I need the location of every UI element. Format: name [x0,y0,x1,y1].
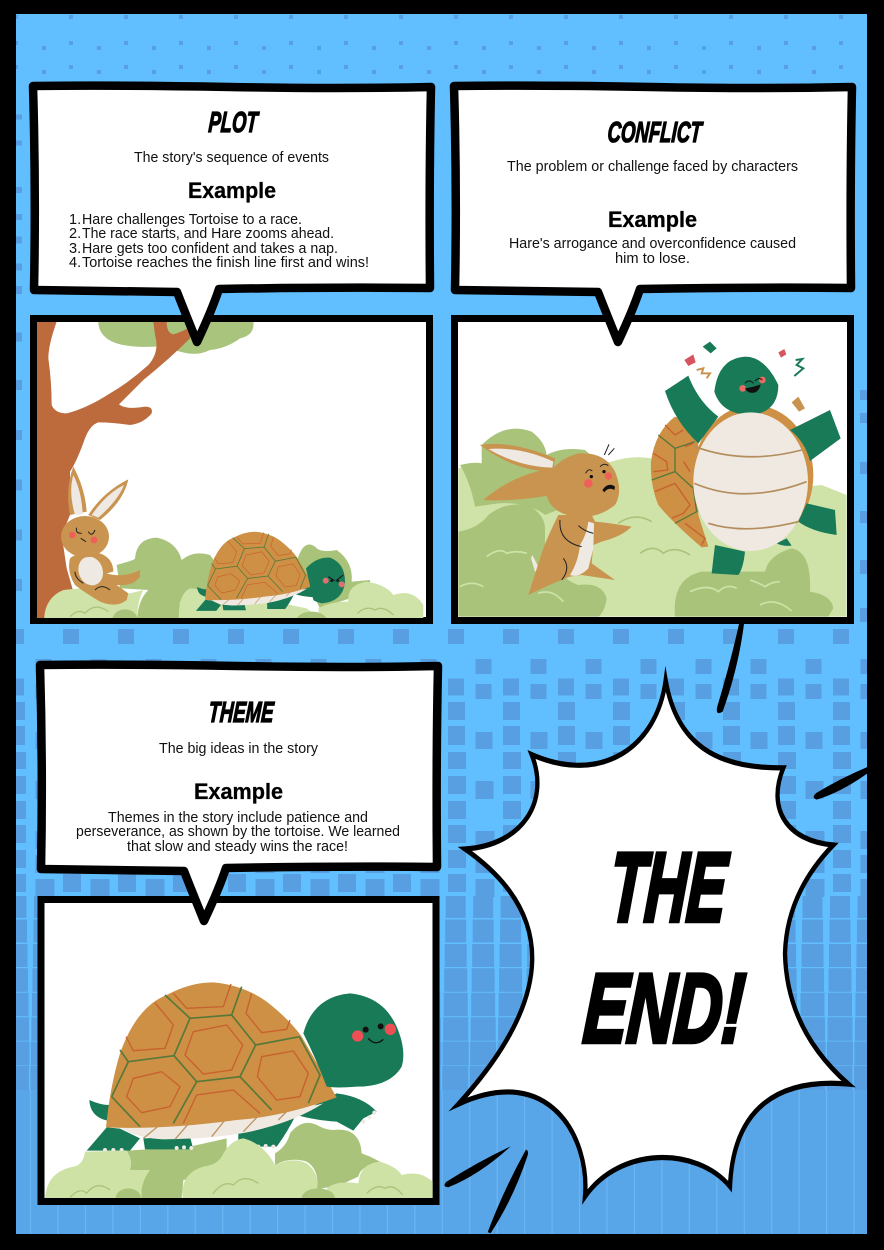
starburst shape [458,680,848,1197]
text: conflict example [509,236,796,267]
list: plot events: 2. [69,226,81,242]
speech bubble: conflict [454,86,852,342]
heading: conflict: CONFLICT [607,117,704,149]
small tortoise [196,532,345,611]
list: plot events: 4. [69,255,81,271]
text: the: THE [607,832,732,942]
bushes [44,538,424,618]
panel: plot illustration [34,318,430,631]
heading: plot: PLOT [208,107,260,139]
back bushes [127,1123,380,1198]
text: theme example: that slow and steady wins the race! [127,839,348,855]
text: theme example: Themes in the story include patience and [108,810,368,826]
big tortoise [87,982,403,1152]
tortoise cheering [651,357,841,575]
panel: conflict illustration [454,318,850,620]
tree trunk [37,322,190,623]
heading: theme example: Example [194,779,283,804]
list: plot events: 1. [69,212,81,228]
heading: theme: THEME [208,697,276,729]
text: conflict definition: The problem or challenge faced by characters [507,159,798,175]
list: plot events: 3. [69,241,81,257]
text: theme definition: The big ideas in the story [159,741,319,757]
list: plot events: The race starts, and Hare zooms ahead. [82,226,334,242]
meadow [458,457,847,617]
heading: plot example: Example [188,178,276,203]
list: plot events: Hare gets too confident and takes a nap. [82,241,338,257]
panel: theme illustration [41,900,436,1208]
speech bubble: theme [40,665,438,921]
burst: the end [458,680,848,1197]
list: plot events [69,212,369,271]
text: conflict example: him to lose. [615,251,690,267]
bushes [458,429,833,617]
list: plot events: Tortoise reaches the finish line first and wins! [82,255,369,271]
rabbit sleeping [61,467,140,605]
tree foliage [98,322,253,354]
action lines around burst [445,624,867,1233]
text: conflict example: Hare's arrogance and overconfidence caused [509,236,796,252]
rabbit surprised [480,444,632,595]
heading: conflict example: Example [608,207,697,232]
speech bubble: plot [33,86,431,342]
text: theme example [76,810,400,855]
text: plot definition: The story's sequence of events [134,150,329,166]
text: end: END! [581,953,748,1063]
confetti [684,342,805,412]
front bushes [45,1138,433,1198]
list: plot events: Hare challenges Tortoise to a race. [82,212,302,228]
text: theme example: perseverance, as shown by the tortoise. We learned [76,824,400,840]
